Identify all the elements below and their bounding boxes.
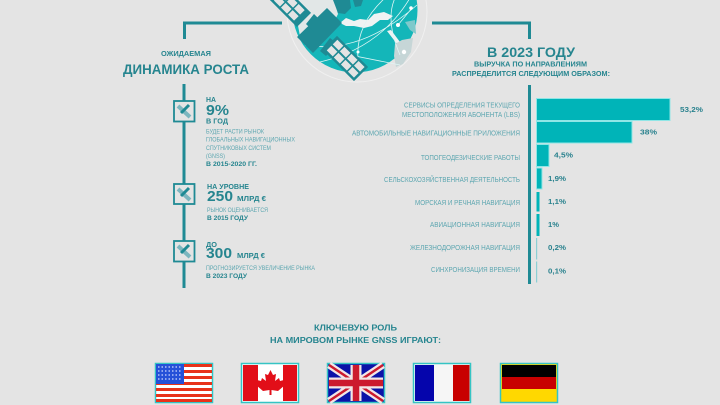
bar values: 4,5% [554, 150, 573, 160]
stat text: В 2015 ГОДУ [207, 215, 249, 222]
bar values: 0,1% [548, 266, 566, 276]
stat text: В ГОД [206, 118, 228, 126]
stat text: 9% [206, 103, 229, 119]
stat text: 250 [207, 188, 233, 205]
bar values: 0,2% [548, 243, 566, 252]
stat text: ПРОГНОЗИРУЕТСЯ УВЕЛИЧЕНИЕ РЫНКА [206, 265, 315, 272]
stat text: В 2023 ГОДУ [206, 273, 248, 280]
timeline item: 300 billion [174, 241, 315, 280]
heading: key players: КЛЮЧЕВУЮ РОЛЬ [314, 324, 397, 333]
bar labels: СИНХРОНИЗАЦИЯ ВРЕМЕНИ [431, 265, 520, 274]
icon: satellite [263, 0, 368, 81]
bar chart: revenue by segment [352, 98, 703, 282]
heading: revenue 2023: В 2023 ГОДУ [487, 44, 575, 60]
bar values: 1,9% [548, 174, 566, 183]
bar labels: СЕЛЬСКОХОЗЯЙСТВЕННАЯ ДЕЯТЕЛЬНОСТЬ [384, 175, 520, 184]
bar values: 38% [640, 128, 657, 136]
bar values: 1% [548, 220, 559, 229]
stat text [207, 184, 268, 222]
stat text [206, 97, 295, 168]
bar labels: МЕСТОПОЛОЖЕНИЯ АБОНЕНТА (LBS) [402, 110, 520, 119]
heading: key players: НА МИРОВОМ РЫНКЕ GNSS ИГРАЮТ: [270, 336, 441, 345]
stat text: РЫНОК ОЦЕНИВАЕТСЯ [207, 207, 268, 214]
stat text: МЛРД € [237, 251, 266, 260]
chart axis line [528, 85, 531, 284]
flag: France [414, 364, 470, 402]
flag: USA [156, 364, 212, 402]
stat text: ГЛОБАЛЬНЫХ НАВИГАЦИОННЫХ [206, 136, 295, 144]
right bracket [432, 23, 530, 39]
stat text: НА [206, 97, 216, 104]
bar values [548, 105, 703, 276]
bar labels: АВТОМОБИЛЬНЫЕ НАВИГАЦИОННЫЕ ПРИЛОЖЕНИЯ [352, 128, 520, 138]
left bracket [184, 23, 282, 39]
stat text [206, 242, 315, 280]
icon: satellite badge [174, 101, 194, 122]
heading: key players [270, 324, 441, 345]
stat text: ДО [206, 242, 218, 249]
bars [536, 98, 670, 282]
timeline item: 250 billion [174, 184, 268, 222]
stat text: НА УРОВНЕ [207, 184, 249, 191]
stat text: СПУТНИКОВЫХ СИСТЕМ [206, 145, 271, 152]
flag: Germany [500, 364, 558, 402]
bar labels: МОРСКАЯ И РЕЧНАЯ НАВИГАЦИЯ [415, 198, 520, 207]
heading: revenue 2023: ВЫРУЧКА ПО НАПРАВЛЕНИЯМ [474, 62, 587, 69]
heading: growth dynamics: ОЖИДАЕМАЯ [161, 51, 211, 58]
bar labels: СЕРВИСЫ ОПРЕДЕЛЕНИЯ ТЕКУЩЕГО [404, 100, 520, 110]
icon: satellite badge [174, 184, 194, 204]
bar labels [352, 100, 520, 274]
stat text: В 2015-2020 ГГ. [206, 161, 257, 168]
illustration: globe with satellite [263, 0, 427, 82]
flag: United Kingdom [328, 364, 384, 402]
icon: globe [287, 0, 427, 82]
bar labels: ЖЕЛЕЗНОДОРОЖНАЯ НАВИГАЦИЯ [410, 243, 520, 252]
bar values: 53,2% [680, 105, 703, 114]
timeline line [182, 84, 186, 288]
timeline item: 9% [174, 97, 295, 168]
flag: Canada [242, 364, 298, 402]
bar values: 1,1% [548, 197, 566, 206]
stat text: МЛРД € [237, 194, 267, 203]
heading: growth dynamics: ДИНАМИКА РОСТА [123, 62, 249, 77]
heading: growth dynamics [123, 51, 249, 77]
heading: revenue 2023 [452, 44, 610, 78]
icon: satellite badge [174, 241, 194, 262]
heading: revenue 2023: РАСПРЕДЕЛИТСЯ СЛЕДУЮЩИМ ОБРАЗОМ: [452, 71, 610, 78]
stat text: (GNSS) [206, 153, 225, 160]
bar labels: ТОПОГЕОДЕЗИЧЕСКИЕ РАБОТЫ [421, 153, 520, 162]
stat text: 300 [206, 245, 232, 262]
bar labels: АВИАЦИОННАЯ НАВИГАЦИЯ [430, 220, 520, 229]
stat text: БУДЕТ РАСТИ РЫНОК [206, 128, 264, 136]
